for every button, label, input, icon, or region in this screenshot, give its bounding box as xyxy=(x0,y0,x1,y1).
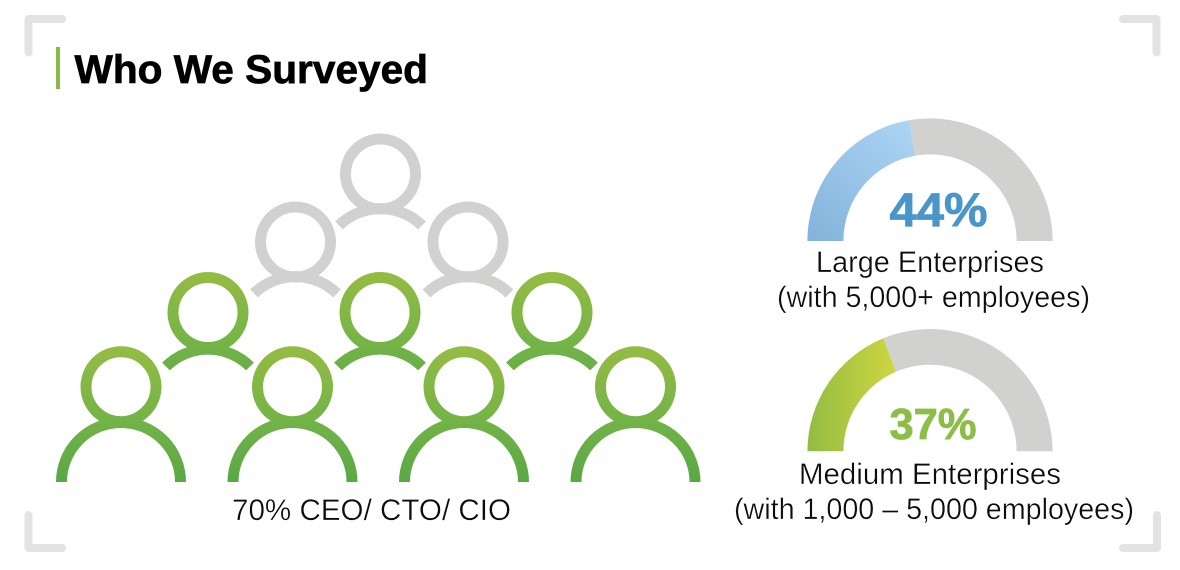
person: top xyxy=(339,139,422,226)
heading text: Who We Surveyed xyxy=(74,48,428,92)
label: large enterprises: (with 5,000+ employees) xyxy=(777,281,1090,314)
person: middle right xyxy=(510,278,594,366)
green people, bottom row xyxy=(62,352,695,482)
person: gray right xyxy=(426,207,510,294)
label: medium enterprises: (with 1,000 – 5,000 employees) xyxy=(734,493,1134,526)
person: bottom 2 xyxy=(233,352,352,482)
heading accent bar xyxy=(56,47,60,89)
person: gray left xyxy=(254,207,337,294)
label: medium enterprises xyxy=(734,458,1134,526)
green people, middle row xyxy=(166,278,594,366)
label: large enterprises xyxy=(777,246,1090,314)
gauge track xyxy=(909,118,1053,241)
person: bottom 4 xyxy=(576,352,695,482)
gauge value: 37% xyxy=(890,400,976,449)
heading xyxy=(56,47,428,92)
pictogram caption: 70% CEO/ CTO/ CIO xyxy=(232,494,511,527)
gauge fill xyxy=(807,120,915,241)
person: bottom 3 xyxy=(404,352,524,482)
gauge value: 44% xyxy=(890,183,988,236)
gauge track xyxy=(883,329,1053,451)
person: bottom 1 xyxy=(62,352,180,482)
gray people xyxy=(254,139,510,294)
gauge: large enterprises xyxy=(807,118,1053,241)
people pictogram: 70% highlighted xyxy=(62,139,695,482)
person: middle left xyxy=(166,278,250,366)
gauge: medium enterprises xyxy=(807,329,1053,451)
label: medium enterprises: Medium Enterprises xyxy=(799,458,1061,491)
person: middle centre xyxy=(338,278,422,366)
label: large enterprises: Large Enterprises xyxy=(816,246,1044,279)
gauge fill xyxy=(807,338,896,451)
